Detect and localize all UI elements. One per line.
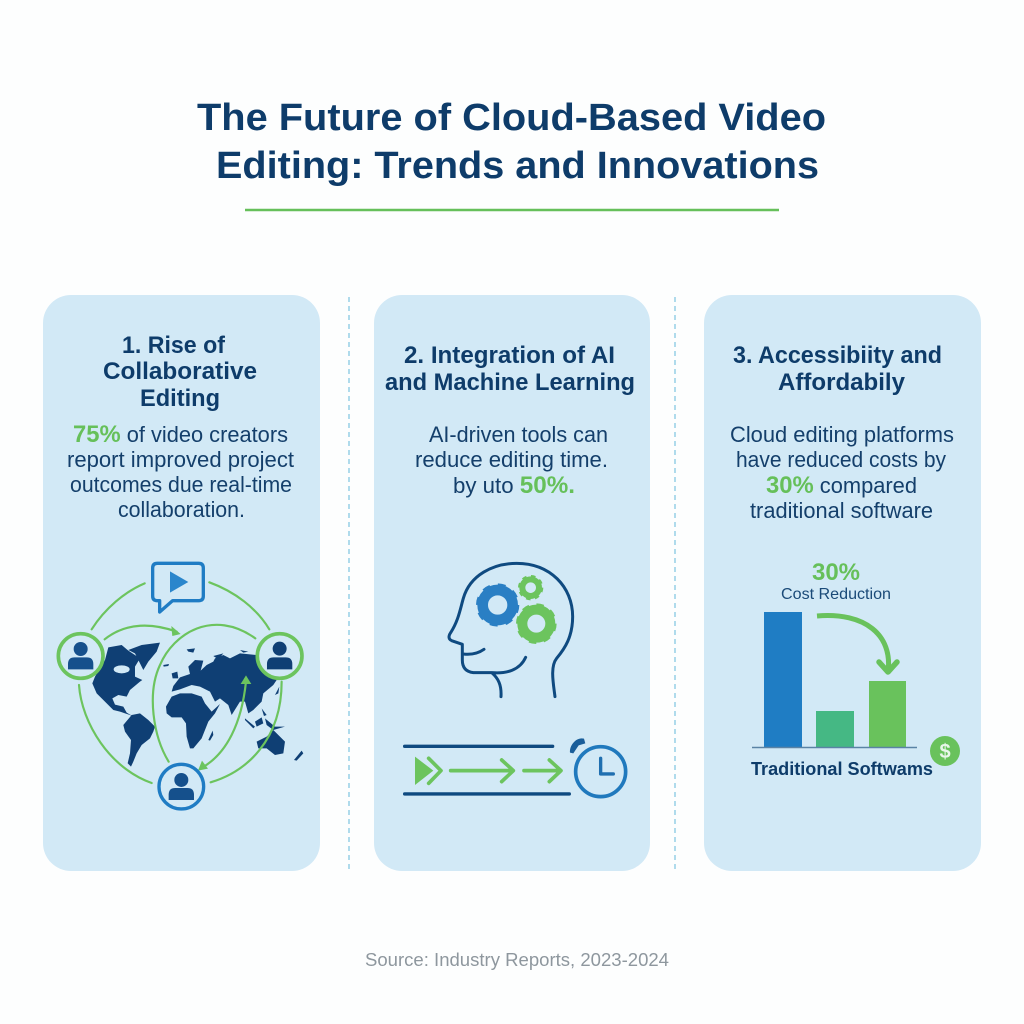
text: collaboration statistic: 75% of video creators xyxy=(73,421,288,448)
icon: stopwatch xyxy=(570,738,626,797)
text: cost statistic xyxy=(730,422,954,523)
text: AI statistic: by uto 50%. xyxy=(453,472,575,499)
arrowheads xyxy=(171,626,251,771)
text: collaboration statistic xyxy=(67,421,294,522)
bar chart: cost reduction xyxy=(751,559,960,779)
illustration: head with gears and timeline xyxy=(405,563,626,797)
source note: Source: Industry Reports, 2023-2024 xyxy=(365,949,669,970)
chart label: cost reduction: Cost Reduction xyxy=(781,586,891,603)
panel: accessibility and affordability xyxy=(704,295,981,871)
icon: fast forward and arrows xyxy=(415,757,561,785)
heading: rise of collaborative editing: Collaborative xyxy=(103,358,257,385)
heading: rise of collaborative editing xyxy=(103,332,257,412)
text: cost statistic: 30% compared xyxy=(766,472,917,499)
heading: rise of collaborative editing: Editing xyxy=(140,385,220,412)
text: AI statistic: reduce editing time. xyxy=(415,447,608,472)
heading: accessibility: Affordabily xyxy=(778,369,906,396)
bars xyxy=(764,612,906,747)
heading: rise of collaborative editing: 1. Rise of xyxy=(122,332,226,359)
icon: user, right xyxy=(257,634,302,678)
icon: large green gear xyxy=(518,606,554,642)
title: The Future of Cloud-Based Video xyxy=(197,97,826,139)
title: Editing: Trends and Innovations xyxy=(216,145,819,187)
icon: dollar coin xyxy=(930,736,960,766)
text: AI statistic xyxy=(415,422,608,499)
text: cost statistic: traditional software xyxy=(750,498,933,523)
icon: dollar coin: $ xyxy=(939,741,951,763)
text: collaboration statistic: collaboration. xyxy=(118,497,245,522)
icon: video speech bubble xyxy=(153,563,203,612)
panel: AI and machine learning xyxy=(374,295,650,871)
text: AI statistic: AI-driven tools can xyxy=(429,422,608,447)
icon: small green gear xyxy=(520,577,542,599)
heading: integration of AI xyxy=(385,342,635,396)
chart label: 30 percent: 30% xyxy=(812,559,860,586)
text: collaboration statistic: report improved project xyxy=(67,447,294,472)
timeline lines xyxy=(405,746,569,794)
heading: integration of AI: and Machine Learning xyxy=(385,369,635,396)
title xyxy=(197,97,826,187)
text: cost statistic: Cloud editing platforms xyxy=(730,422,954,447)
heading: accessibility xyxy=(733,342,942,396)
text: cost statistic: have reduced costs by xyxy=(736,447,946,472)
text: collaboration statistic: outcomes due real-time xyxy=(70,472,292,497)
heading: integration of AI: 2. Integration of AI xyxy=(404,342,615,369)
icon: blue gear xyxy=(479,586,517,624)
panel: collaborative editing xyxy=(43,295,320,871)
icon: user, bottom xyxy=(159,764,204,809)
arrow: reduction xyxy=(817,616,897,672)
heading: accessibility: 3. Accessibiity and xyxy=(733,342,942,369)
world map xyxy=(92,643,303,767)
connection arcs xyxy=(79,582,282,783)
icon: head outline xyxy=(449,563,573,697)
illustration: world map with connected users xyxy=(58,563,303,809)
icon: user, left xyxy=(58,634,103,678)
chart caption: Traditional Softwams xyxy=(751,759,933,779)
